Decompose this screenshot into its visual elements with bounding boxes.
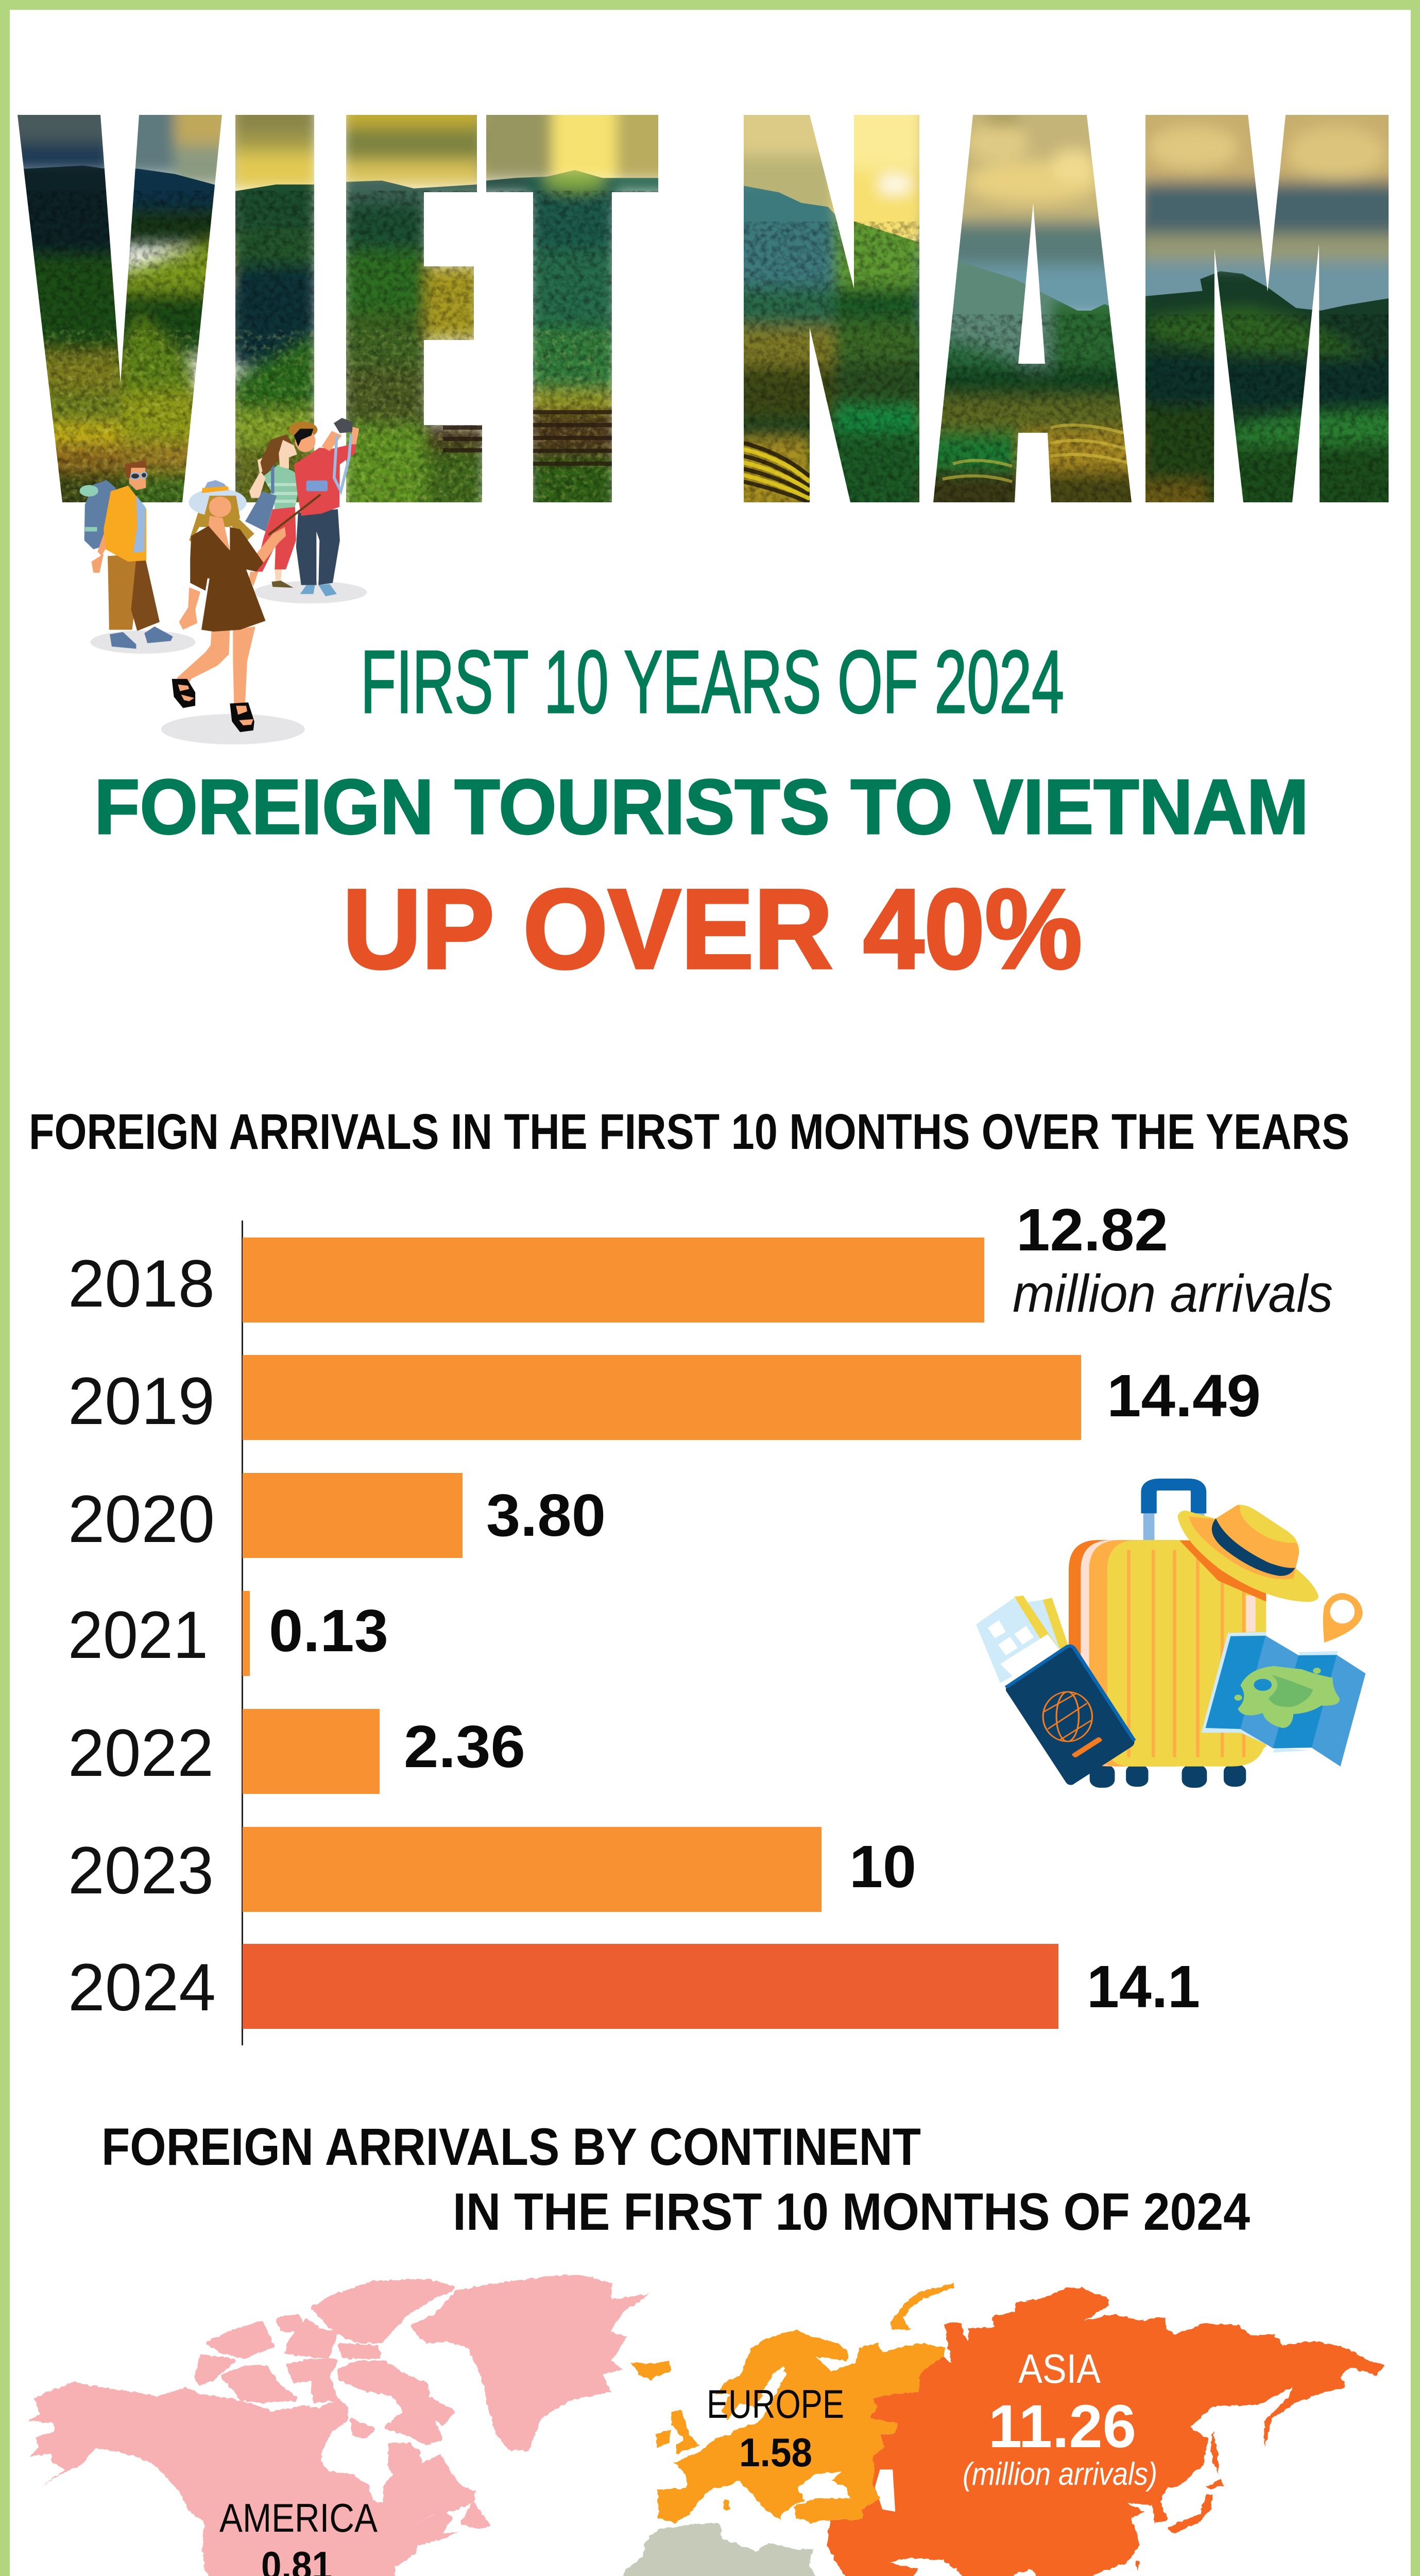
bar 2019: 14.49 — [1107, 1362, 1261, 1429]
bar 2020: 2020 — [68, 1481, 215, 1556]
world map — [28, 2274, 1385, 2576]
bar 2023: 10 — [849, 1833, 916, 1900]
headline figure: UP OVER 40% — [343, 866, 1082, 992]
foliage texture — [10, 191, 1396, 510]
bar 2021 — [68, 1591, 388, 1676]
bar 2020 — [68, 1473, 606, 1558]
bar 2023: 2023 — [68, 1833, 214, 1908]
landscape in NAM letters — [744, 115, 1389, 502]
heading: FOREIGN TOURISTS TO VIETNAM — [94, 763, 1309, 850]
label: Asia 11.26 million arrivals — [963, 2346, 1157, 2492]
bar 2022 — [68, 1709, 525, 1794]
straw hat — [1177, 1505, 1319, 1602]
suitcase wheels — [1090, 1764, 1246, 1788]
bar 2018 — [68, 1196, 1333, 1323]
title word art: VIET NAM filled with mountain landscape — [18, 115, 1389, 502]
location pin — [1323, 1593, 1363, 1642]
label: Asia 11.26 million arrivals: ASIA — [1018, 2346, 1101, 2392]
bar 2021: 2021 — [68, 1597, 208, 1672]
bar 2018: 2018 — [68, 1246, 215, 1321]
subtitle: FIRST 10 YEARS OF 2024 — [361, 632, 1064, 732]
bar 2019 — [68, 1355, 1261, 1440]
suitcase handle — [1143, 1484, 1204, 1541]
icon: suitcase, hat, passport, tickets and map — [976, 1484, 1365, 1788]
folded map — [1201, 1632, 1365, 1767]
label: Europe 1.58: EUROPE — [707, 2381, 844, 2427]
continent: Asia — [827, 2287, 1385, 2576]
tickets — [976, 1596, 1069, 1683]
map title: FOREIGN ARRIVALS BY CONTINENT — [101, 2117, 921, 2176]
bar chart: foreign arrivals by year — [68, 1196, 1333, 2045]
illustration: group of travellers — [80, 418, 367, 744]
label: Asia 11.26 million arrivals: (million arrivals) — [963, 2456, 1157, 2492]
rice terraces — [443, 412, 1132, 502]
continent: Africa — [615, 2523, 877, 2576]
label: America 0.81 — [219, 2495, 378, 2576]
traveller: woman in brown dress — [172, 480, 320, 732]
label: America 0.81: AMERICA — [219, 2495, 378, 2540]
suitcase body — [1069, 1540, 1266, 1767]
bar 2021: 0.13 — [269, 1597, 388, 1664]
map title — [101, 2117, 1250, 2241]
label: Europe 1.58: 1.58 — [739, 2430, 812, 2475]
sunlit foliage texture — [44, 330, 612, 502]
Caspian sea — [875, 2469, 895, 2512]
bar 2018: million arrivals — [1013, 1264, 1333, 1323]
label: Asia 11.26 million arrivals: 11.26 — [988, 2393, 1136, 2461]
bar 2020: 3.80 — [486, 1482, 606, 1549]
bar 2022: 2022 — [68, 1715, 214, 1790]
passport — [1006, 1646, 1135, 1785]
bar 2023 — [68, 1827, 916, 1912]
bar 2019: 2019 — [68, 1363, 215, 1438]
traveller: couple taking a photo — [245, 418, 359, 596]
ground shadows — [90, 581, 367, 744]
label: Europe 1.58 — [707, 2381, 844, 2475]
continent: Europe — [630, 2283, 954, 2523]
map title: IN THE FIRST 10 MONTHS OF 2024 — [453, 2182, 1250, 2241]
continent: America — [28, 2274, 650, 2576]
bar 2024 — [68, 1944, 1200, 2029]
bar 2024: 2024 — [68, 1950, 216, 2025]
bar 2022: 2.36 — [404, 1713, 525, 1780]
traveller: man with backpack — [80, 460, 173, 649]
bar 2018: 12.82 — [1016, 1196, 1168, 1263]
landscape in VIET letters — [18, 115, 658, 502]
bar 2024: 14.1 — [1087, 1953, 1200, 2020]
